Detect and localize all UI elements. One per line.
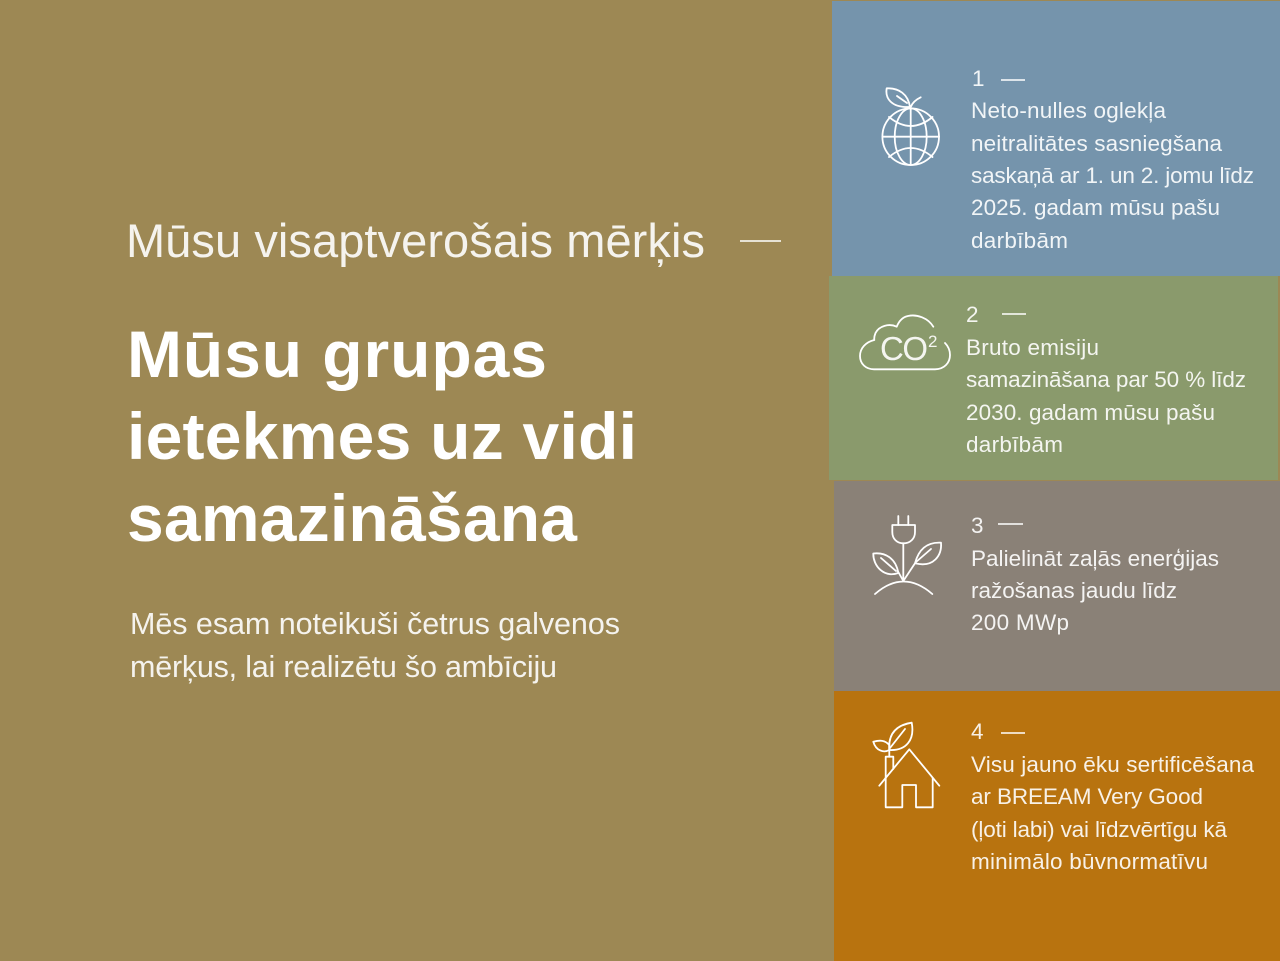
goal 3 text: ražošanas jaudu līdz [971, 578, 1177, 603]
goal 3 text: 3 [971, 513, 984, 538]
icon: plug plant [873, 516, 941, 594]
intro text: mērķus, lai realizētu šo ambīciju [130, 650, 557, 684]
goal 2 text: 2 [966, 302, 979, 327]
goal 3 text: Palielināt zaļās enerģijas [971, 546, 1219, 571]
goal 1 text: saskaņā ar 1. un 2. jomu līdz [971, 163, 1254, 188]
goal 2 text: 2030. gadam mūsu pašu [966, 400, 1215, 425]
intro text [130, 607, 620, 684]
goal 1 text [971, 66, 1254, 253]
main heading: ietekmes uz vidi [127, 399, 637, 473]
goal 1 text: Neto-nulles oglekļa [971, 98, 1166, 123]
goal 4 text: Visu jauno ēku sertificēšana [971, 752, 1254, 777]
icon: apple globe [882, 88, 939, 165]
goal 4 text: ar BREEAM Very Good [971, 784, 1203, 809]
goal 4 text: minimālo būvnormatīvu [971, 849, 1208, 874]
goal 2 text: samazināšana par 50 % līdz [966, 367, 1246, 392]
subtitle: overall goal: Mūsu visaptverošais mērķis [126, 214, 705, 267]
panel: goal 2 background [829, 276, 1278, 480]
goal 4 text: 4 [971, 719, 984, 744]
goal 1 text: 2025. gadam mūsu pašu [971, 195, 1220, 220]
goal 3 text [971, 513, 1219, 635]
panel: goal 4 background [834, 691, 1280, 961]
icon: CO2 cloud: 2 [928, 332, 937, 351]
intro text: Mēs esam noteikuši četrus galvenos [130, 607, 620, 641]
goal 4 text: (ļoti labi) vai līdzvērtīgu kā [971, 817, 1227, 842]
goal 2 text: Bruto emisiju [966, 335, 1099, 360]
main heading: samazināšana [127, 481, 578, 555]
main heading: Mūsu grupas [127, 317, 547, 391]
main heading [127, 317, 637, 555]
goal 1 text: 1 [972, 66, 985, 91]
panel: goal 1 background [832, 1, 1280, 276]
goal 2 text: darbībām [966, 432, 1063, 457]
goal 3 text: 200 MWp [971, 610, 1069, 635]
icon: house with leaves [873, 723, 939, 807]
goal 2 text [966, 302, 1246, 457]
goal 4 text [971, 719, 1254, 874]
goal 1 text: neitralitātes sasniegšana [971, 131, 1222, 156]
icon: CO2 cloud: CO [880, 330, 927, 367]
goal 1 text: darbībām [971, 228, 1068, 253]
icon: CO2 cloud [860, 315, 950, 369]
panel: goal 3 background [834, 481, 1280, 691]
